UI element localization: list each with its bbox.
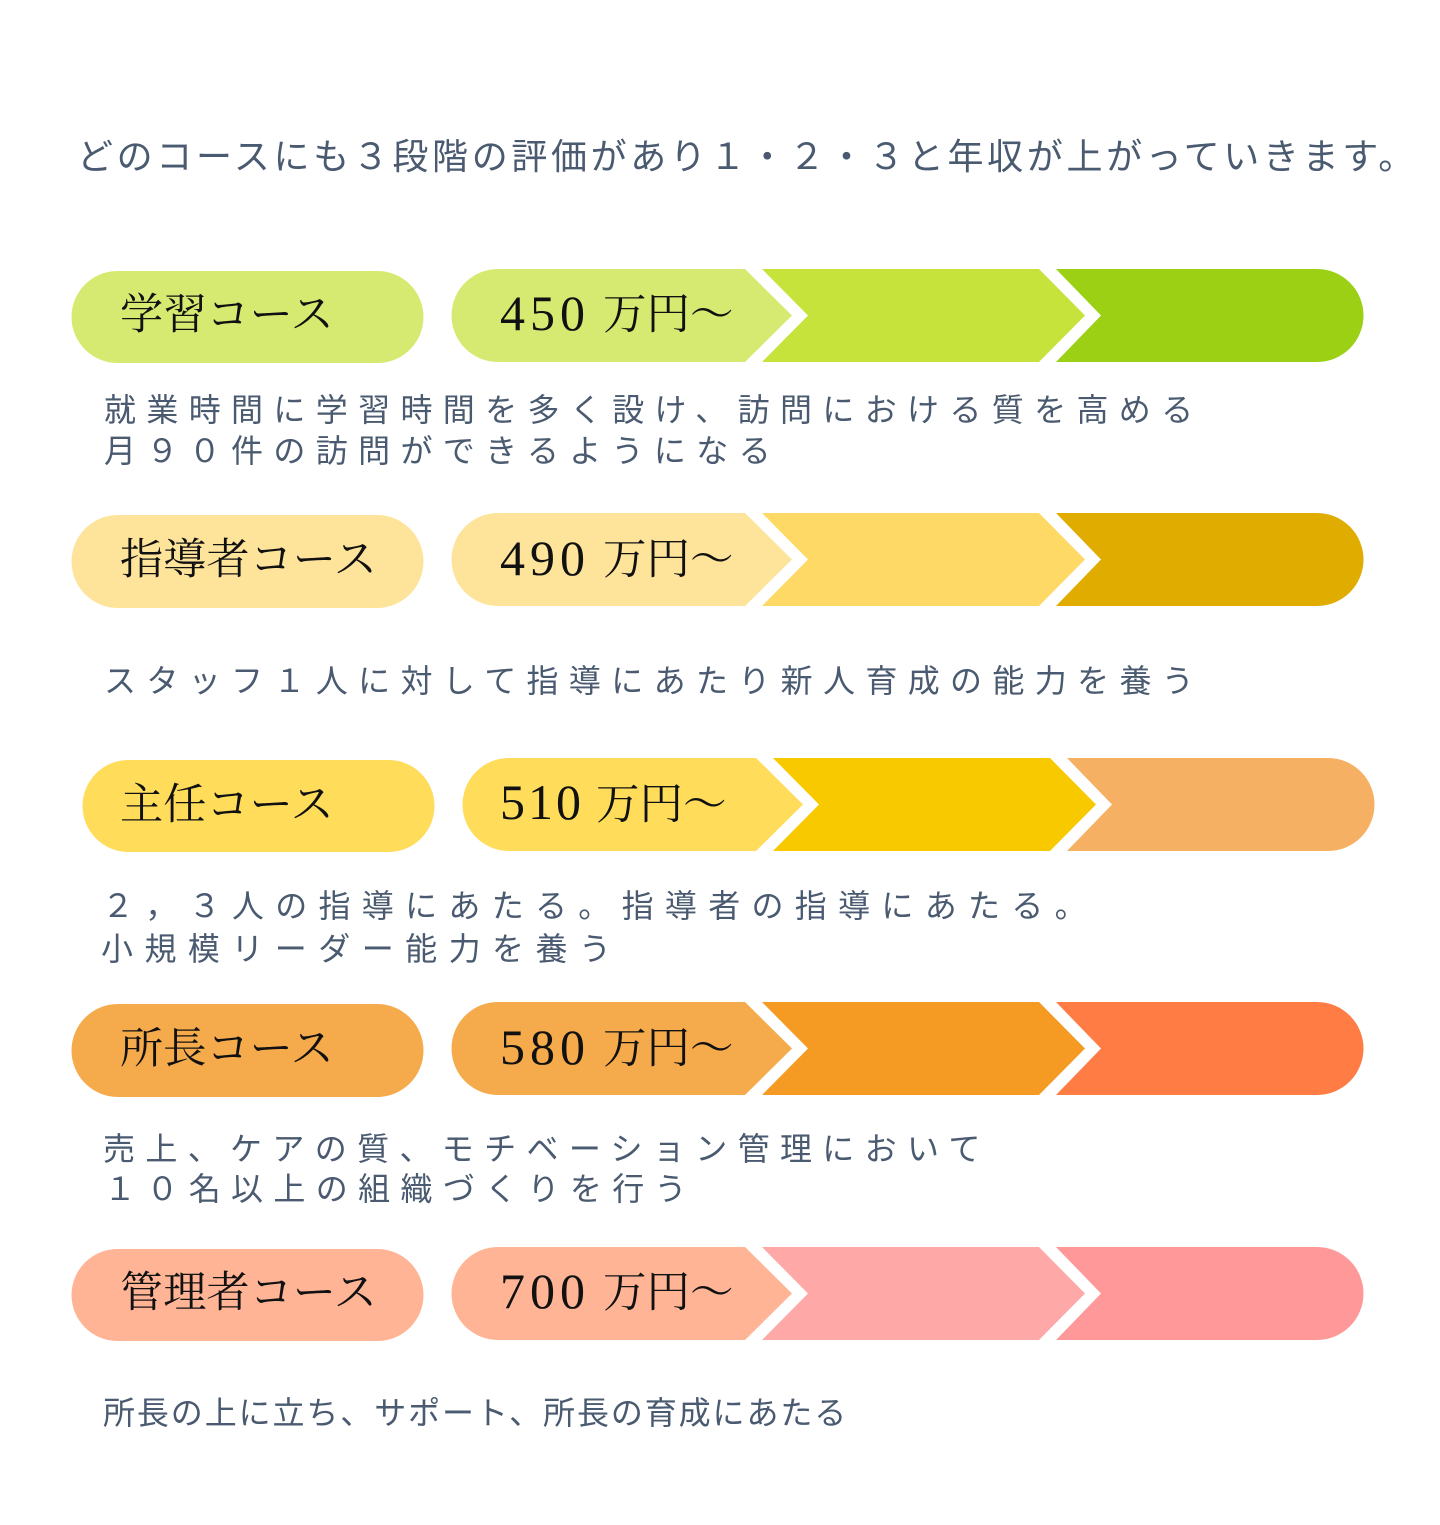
- description: スタッフ１人に対して指導にあたり新人育成の能力を養う: [104, 663, 1204, 699]
- description: 月９０件の訪問ができるようになる: [104, 433, 781, 469]
- title: どのコースにも３段階の評価があり１・２・３と年収が上がっていきます。: [77, 136, 1418, 177]
- panel: 指導者コース: [72, 513, 1364, 699]
- salary arrow: step 1: 450: [500, 285, 590, 341]
- salary arrow: step 2: [762, 1247, 1085, 1340]
- course label pill: 管理者コース: [120, 1270, 377, 1317]
- course label pill: 指導者コース: [120, 537, 377, 584]
- salary arrow: step 1: 万円～: [603, 536, 734, 584]
- salary arrow: step 3: [1056, 513, 1364, 606]
- course label pill: 学習コース: [120, 292, 334, 339]
- description: 売上、ケアの質、モチベーション管理において: [103, 1131, 991, 1167]
- salary arrow: step 1: [452, 1247, 792, 1340]
- salary arrow: step 1: 510: [500, 774, 584, 830]
- course label pill: [72, 1249, 424, 1341]
- salary arrow: step 1: [452, 513, 792, 606]
- description: １０名以上の組織づくりを行う: [104, 1171, 697, 1207]
- panel: 学習コース: [72, 269, 1364, 469]
- salary arrow: step 2: [762, 513, 1085, 606]
- salary arrow: step 3: [1056, 269, 1364, 362]
- description: 所長の上に立ち、サポート、所長の育成にあたる: [103, 1395, 848, 1431]
- salary arrow: step 1: 万円～: [603, 1269, 734, 1317]
- description: 就業時間に学習時間を多く設け、訪問における質を高める: [104, 392, 1204, 428]
- description: ２，３人の指導にあたる。指導者の指導にあたる。: [102, 888, 1098, 924]
- salary arrow: step 1: [452, 1002, 792, 1095]
- course label pill: [72, 271, 424, 363]
- description: [104, 392, 1204, 469]
- salary arrow: step 1: 580: [500, 1019, 590, 1075]
- salary arrow: step 1: 万円～: [596, 781, 726, 829]
- salary arrow: step 1: 万円～: [603, 291, 734, 339]
- salary arrow: step 3: [1067, 758, 1374, 851]
- description: [101, 888, 1098, 967]
- course label pill: [82, 760, 434, 852]
- course label pill: 主任コース: [120, 782, 334, 829]
- salary arrow: step 2: [762, 1002, 1085, 1095]
- course label pill: 所長コース: [120, 1026, 334, 1073]
- description: 小規模リーダー能力を養う: [101, 931, 622, 967]
- salary arrow: step 1: [462, 758, 803, 851]
- salary arrow: step 2: [773, 758, 1096, 851]
- salary arrow: step 1: 700: [500, 1263, 590, 1319]
- salary arrow: step 3: [1056, 1002, 1364, 1095]
- panel: 管理者コース: [72, 1247, 1364, 1431]
- description: [103, 1131, 991, 1207]
- salary arrow: step 1: 490: [500, 530, 590, 586]
- salary arrow: step 2: [762, 269, 1085, 362]
- salary arrow: step 1: 万円～: [603, 1025, 734, 1073]
- course label pill: [72, 1004, 424, 1097]
- course label pill: [72, 515, 424, 608]
- salary arrow: step 3: [1056, 1247, 1364, 1340]
- panel: 所長コース: [72, 1002, 1364, 1207]
- panel: 主任コース: [82, 758, 1374, 967]
- salary arrow: step 1: [452, 269, 792, 362]
